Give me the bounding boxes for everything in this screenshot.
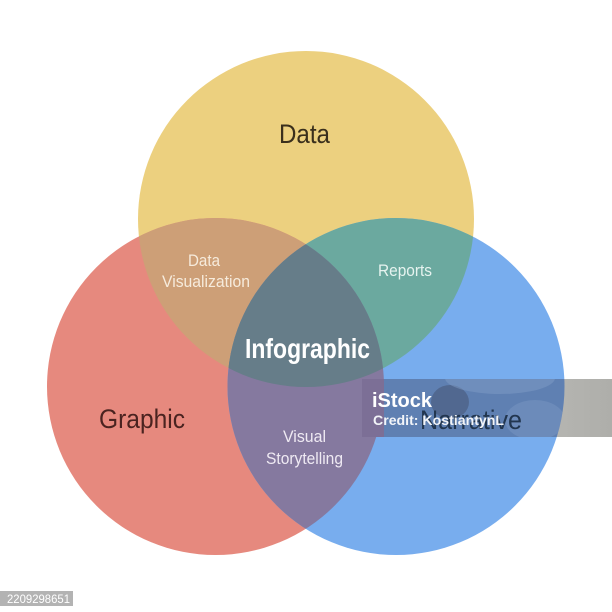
overlap: center — [228, 244, 383, 387]
label: Data Visualization — [162, 251, 250, 291]
label: Graphic: Graphic — [99, 404, 185, 434]
circle: Graphic — [47, 218, 384, 555]
label: Data Visualization: Visualization — [162, 272, 250, 291]
label: Reports: Reports — [378, 261, 432, 280]
label: Visual Storytelling: Visual — [283, 427, 326, 446]
label: Infographic: Infographic — [245, 333, 370, 364]
circle: Data — [138, 51, 474, 387]
label: Narrative: Narrative — [420, 405, 522, 435]
label: Data Visualization: Data — [188, 251, 220, 270]
circle: Narrative — [228, 218, 564, 555]
overlap: Data and Graphic — [139, 218, 306, 368]
image id tag: 2209298651 — [7, 592, 70, 606]
overlap: Data and Narrative — [228, 218, 473, 368]
label: Visual Storytelling — [266, 427, 343, 468]
overlap: Graphic and Narrative — [228, 244, 384, 529]
label: Visual Storytelling: Storytelling — [266, 449, 343, 468]
watermark band — [362, 379, 612, 437]
watermark text: credit: Credit: KostiantynL — [373, 412, 504, 428]
label: Data: Data — [279, 119, 331, 149]
watermark text: iStock: iStock — [372, 390, 433, 412]
watermark tinted area over circles — [362, 379, 564, 437]
watermark grey area — [362, 379, 612, 437]
